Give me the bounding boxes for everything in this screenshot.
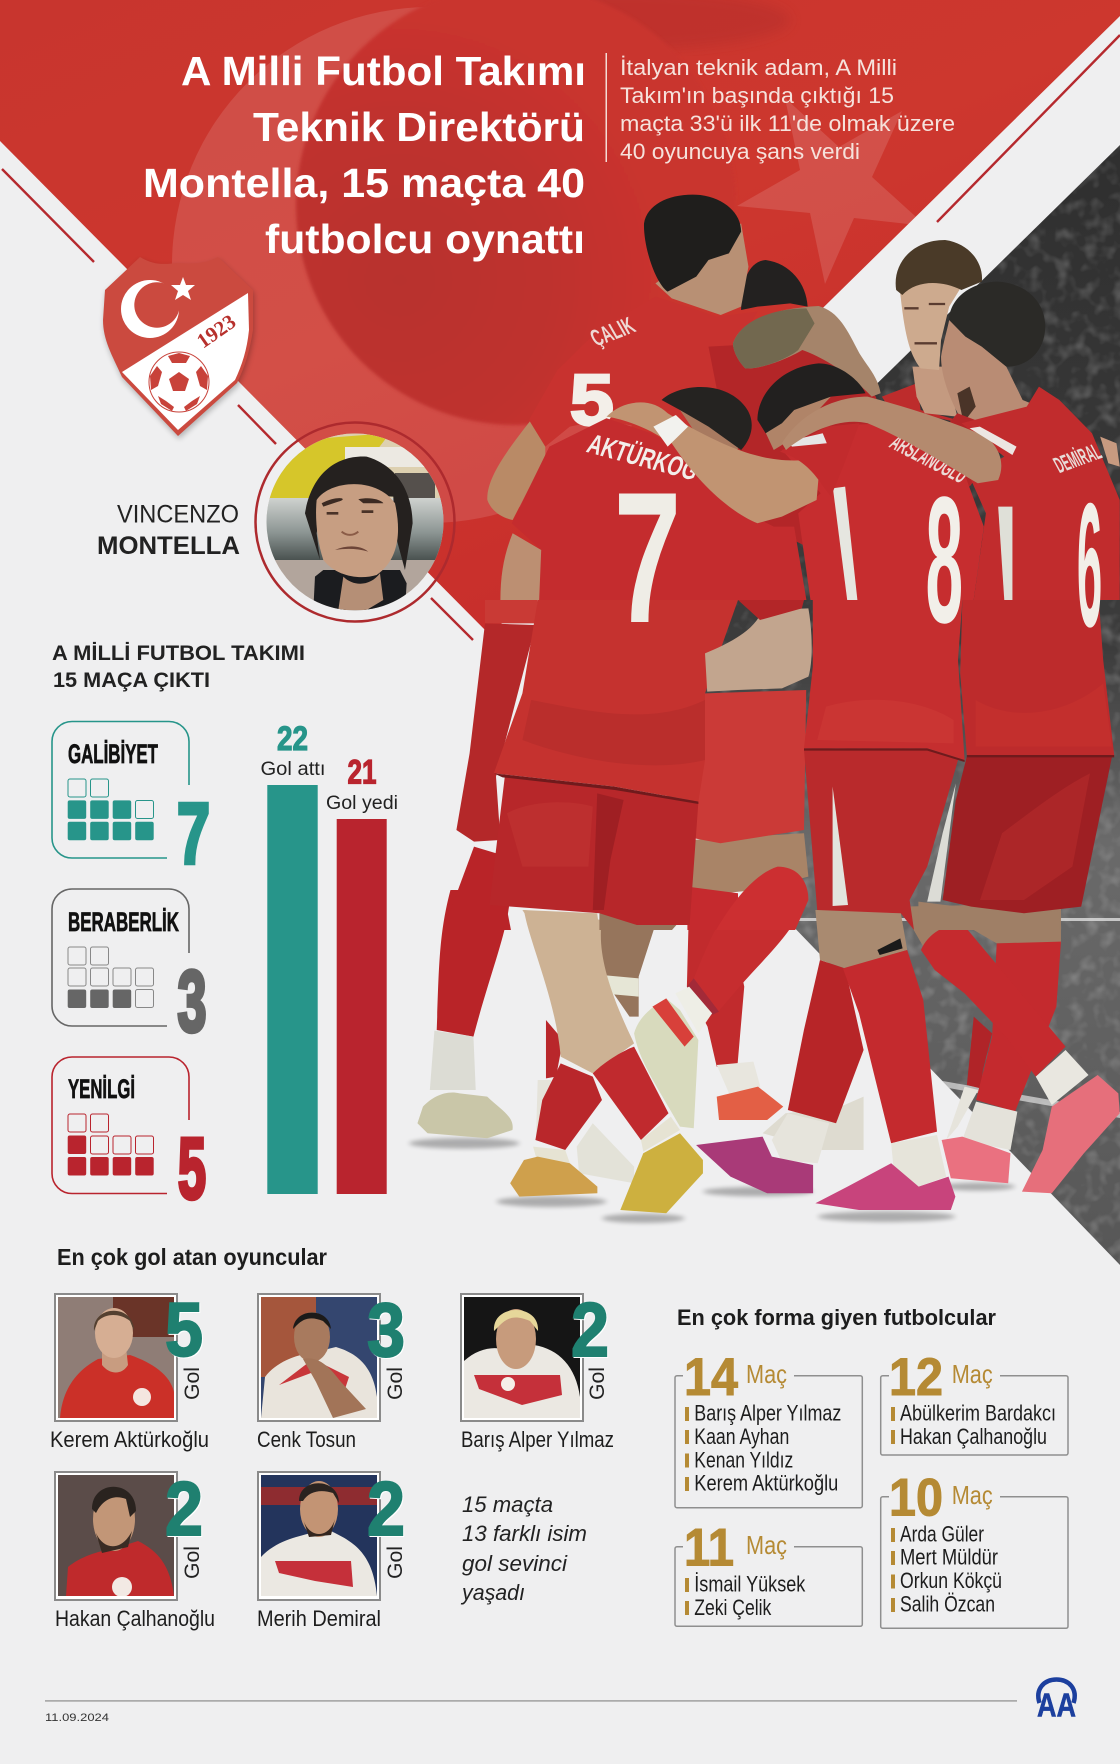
scorer: Barış Alper Yılmaz: 2 bbox=[571, 1288, 609, 1373]
scorer: Merih Demiral: Gol bbox=[384, 1546, 407, 1579]
panel: losses bbox=[52, 1057, 206, 1217]
panel: 10 matches: Mert Müldür bbox=[900, 1545, 998, 1570]
players: upper bodies and heads: AKTÜRKOĞ bbox=[583, 428, 703, 486]
panel: 10 matches: Arda Güler bbox=[900, 1521, 984, 1546]
title: A Milli Futbol Takımı bbox=[181, 48, 586, 94]
panel: 10 matches: 10 bbox=[889, 1469, 943, 1528]
panel: 12 matches: Maç bbox=[952, 1359, 993, 1389]
note: 13 different scorers: yaşadı bbox=[460, 1580, 525, 1605]
title: Teknik Direktörü bbox=[253, 104, 585, 150]
icon: federation crest bbox=[103, 257, 254, 439]
intro text: maçta 33'ü ilk 11'de olmak üzere bbox=[620, 111, 955, 136]
panel: draws bbox=[52, 889, 206, 1050]
coach name: VINCENZO bbox=[117, 500, 239, 528]
scorer: Barış Alper Yılmaz: Barış Alper Yılmaz bbox=[461, 1427, 614, 1452]
title: futbolcu oynattı bbox=[265, 216, 585, 262]
players: shirts and shorts bbox=[443, 600, 1114, 930]
scorer: Kerem Aktürkoğlu: Kerem Aktürkoğlu bbox=[50, 1427, 209, 1452]
players: upper bodies and heads bbox=[487, 195, 1120, 664]
title bbox=[143, 48, 586, 262]
scorer: Barış Alper Yılmaz bbox=[461, 1288, 614, 1452]
panel: wins bbox=[52, 722, 210, 882]
panel: 12 matches bbox=[881, 1348, 1068, 1455]
panel: 14 matches: Kenan Yıldız bbox=[694, 1447, 793, 1472]
scorer: Hakan Çalhanoğlu: 2 bbox=[165, 1467, 203, 1552]
panel: 10 matches bbox=[881, 1469, 1068, 1628]
scorer: Hakan Çalhanoğlu: Hakan Çalhanoğlu bbox=[55, 1606, 215, 1631]
dark stadium photo triangle bbox=[668, 145, 1120, 1265]
note: 13 different scorers bbox=[460, 1492, 587, 1605]
panel: 12 matches: Abülkerim Bardakcı bbox=[900, 1401, 1056, 1426]
players: upper bodies and heads: ÇALIK bbox=[585, 312, 640, 352]
scorer: Cenk Tosun: Cenk Tosun bbox=[257, 1427, 356, 1452]
bar chart: goals scored and conceded: Gol attı bbox=[260, 759, 326, 780]
footer rule bbox=[45, 1700, 1017, 1702]
icon: federation crest: 1923 bbox=[192, 309, 240, 353]
decorative red diagonal lines bbox=[2, 35, 1120, 640]
scorer: Hakan Çalhanoğlu: Gol bbox=[181, 1546, 204, 1579]
scorer: Cenk Tosun: Gol bbox=[384, 1367, 407, 1400]
panel: losses: YENİLGİ bbox=[68, 1074, 135, 1104]
players: legs and boots bbox=[409, 890, 1120, 1223]
panel: draws: BERABERLİK bbox=[68, 907, 179, 937]
icon: Anadolu Agency logo: AA bbox=[1037, 1687, 1076, 1724]
bar chart: goals scored and conceded: 22 bbox=[277, 720, 308, 758]
note: 13 different scorers: gol sevinci bbox=[462, 1551, 568, 1576]
panel: 12 matches: 12 bbox=[889, 1348, 943, 1407]
panel: 11 matches: İsmail Yüksek bbox=[694, 1572, 806, 1597]
portrait: Vincenzo Montella bbox=[256, 422, 454, 622]
scorer: Merih Demiral: 2 bbox=[367, 1467, 405, 1552]
panel: 10 matches: Salih Özcan bbox=[900, 1591, 995, 1616]
panel: 14 matches: Maç bbox=[746, 1359, 787, 1389]
scorer: Kerem Aktürkoğlu: 5 bbox=[165, 1288, 203, 1373]
coach name bbox=[97, 500, 240, 560]
panel: wins: 7 bbox=[177, 786, 210, 882]
panel: 14 matches: Kerem Aktürkoğlu bbox=[694, 1471, 838, 1496]
heading: most capped players: En çok forma giyen futbolcular bbox=[677, 1305, 996, 1330]
bar chart: goals scored and conceded: Gol yedi bbox=[326, 793, 398, 814]
scorer: Kerem Aktürkoğlu bbox=[50, 1288, 209, 1452]
intro text bbox=[620, 55, 955, 164]
scorer: Cenk Tosun bbox=[257, 1288, 407, 1452]
illustration: Turkish players celebrating bbox=[409, 195, 1120, 1223]
players: upper bodies and heads: 5 bbox=[570, 360, 614, 441]
intro text: Takım'ın başında çıktığı 15 bbox=[620, 83, 894, 108]
panel: 10 matches: Orkun Kökçü bbox=[900, 1568, 1002, 1593]
panel: 14 matches bbox=[675, 1348, 862, 1508]
section heading: 15 matches: 15 MAÇA ÇIKTI bbox=[53, 669, 210, 692]
intro text: İtalyan teknik adam, A Milli bbox=[620, 55, 897, 80]
panel: 10 matches: Maç bbox=[952, 1480, 993, 1510]
panel: losses: 5 bbox=[178, 1121, 206, 1217]
scorer: Kerem Aktürkoğlu: Gol bbox=[181, 1367, 204, 1400]
panel: wins: GALİBİYET bbox=[68, 739, 158, 769]
panel: 11 matches: 11 bbox=[684, 1519, 734, 1578]
players: upper bodies and heads: ARSLANOĞLU bbox=[885, 429, 974, 488]
scorer: Barış Alper Yılmaz: Gol bbox=[586, 1367, 609, 1400]
panel: 11 matches: Zeki Çelik bbox=[694, 1595, 772, 1620]
section heading: 15 matches bbox=[52, 642, 305, 692]
coach name: MONTELLA bbox=[97, 532, 240, 560]
bar chart: goals scored and conceded: 21 bbox=[348, 754, 376, 792]
header red flag background bbox=[0, 0, 1120, 650]
heading: top scorers: En çok gol atan oyuncular bbox=[57, 1244, 327, 1270]
players: upper bodies and heads: 7 bbox=[614, 454, 681, 662]
bar chart: goals scored and conceded bbox=[260, 720, 398, 1194]
date: 11.09.2024 bbox=[45, 1712, 109, 1724]
note: 13 different scorers: 15 maçta bbox=[462, 1492, 553, 1517]
title: Montella, 15 maçta 40 bbox=[143, 160, 585, 206]
scorer: Hakan Çalhanoğlu bbox=[55, 1467, 215, 1631]
panel: 12 matches: Hakan Çalhanoğlu bbox=[900, 1424, 1047, 1449]
scorer: Cenk Tosun: 3 bbox=[367, 1288, 405, 1373]
panel: 11 matches bbox=[675, 1519, 862, 1626]
scorer: Merih Demiral: Merih Demiral bbox=[257, 1606, 381, 1631]
scorer: Merih Demiral bbox=[257, 1467, 407, 1631]
section heading: 15 matches: A MİLLİ FUTBOL TAKIMI bbox=[52, 642, 305, 665]
panel: 14 matches: Kaan Ayhan bbox=[694, 1424, 789, 1449]
players: upper bodies and heads: 8 bbox=[926, 459, 963, 660]
intro text: 40 oyuncuya şans verdi bbox=[620, 139, 860, 164]
note: 13 different scorers: 13 farklı isim bbox=[462, 1521, 587, 1546]
panel: 14 matches: 14 bbox=[684, 1348, 738, 1407]
panel: draws: 3 bbox=[178, 954, 206, 1050]
panel: 11 matches: Maç bbox=[746, 1530, 787, 1560]
header divider bbox=[606, 53, 607, 162]
panel: 14 matches: Barış Alper Yılmaz bbox=[694, 1401, 841, 1426]
